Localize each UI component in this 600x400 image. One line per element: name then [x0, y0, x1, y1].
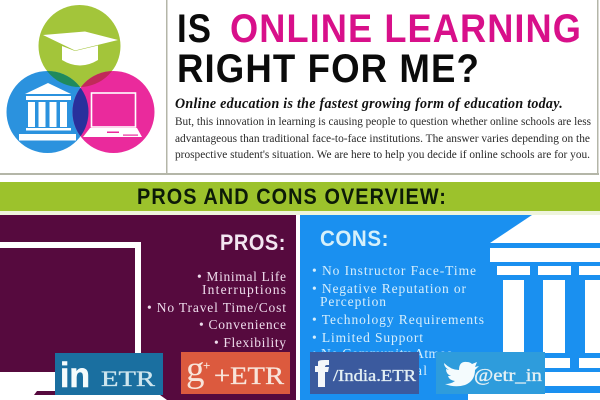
icon: laptop [83, 93, 142, 137]
text block: introduction: Online education is the fastest growing form of education today. [175, 96, 563, 112]
heading: cons: CONS: [320, 226, 389, 251]
list: cons: Trial [396, 363, 427, 378]
text block: introduction [175, 96, 591, 161]
panel: cons [300, 215, 600, 400]
section heading band: PROS AND CONS OVERVIEW: [137, 184, 447, 209]
list: pros: • Flexibility [214, 335, 286, 350]
list: pros [147, 269, 286, 350]
badge: Twitter [436, 352, 545, 394]
list: pros: • No Travel Time/Cost [147, 300, 286, 315]
badge: Google Plus: g [186, 349, 204, 390]
panel: pros [0, 215, 296, 400]
text block: introduction: advantageous than traditional face-to-face institutions. The answer varies depending on the [175, 131, 590, 145]
list: pros: • Convenience [199, 317, 286, 332]
list: cons: • Technology Requirements [312, 312, 484, 327]
icon: large laptop outline [0, 242, 167, 400]
list: cons [312, 263, 484, 378]
icon: venn diagram [6, 5, 154, 153]
badge: Google Plus: + [203, 358, 210, 373]
heading: pros: PROS: [220, 230, 286, 255]
badge: LinkedIn: in [60, 356, 90, 395]
section heading band [0, 182, 600, 215]
badge: Facebook [310, 352, 419, 394]
icon: graduation cap [43, 32, 118, 66]
list: cons: Perception [320, 294, 386, 309]
badge: LinkedIn [55, 353, 163, 395]
list: pros: • Minimal Life [197, 269, 286, 284]
badge: Facebook: /India.ETR [333, 366, 417, 385]
icon: institution building [19, 83, 76, 140]
title: IS [177, 7, 212, 51]
badge: Google Plus [181, 349, 290, 394]
badge: LinkedIn: ETR [101, 366, 155, 391]
list: cons: • No Community Atmos [312, 346, 452, 361]
badge: Twitter: @etr_in [474, 365, 542, 385]
list: cons: • Limited Support [312, 330, 423, 345]
list: pros: Interruptions [202, 282, 286, 297]
badge: Google Plus: +ETR [214, 363, 284, 390]
icon: large institution building [468, 215, 600, 400]
title: RIGHT FOR ME? [177, 47, 480, 91]
title [177, 7, 582, 91]
list: cons: • Negative Reputation or [312, 281, 466, 296]
panel: intro frame [0, 0, 599, 175]
list: cons: • No Instructor Face-Time [312, 263, 476, 278]
